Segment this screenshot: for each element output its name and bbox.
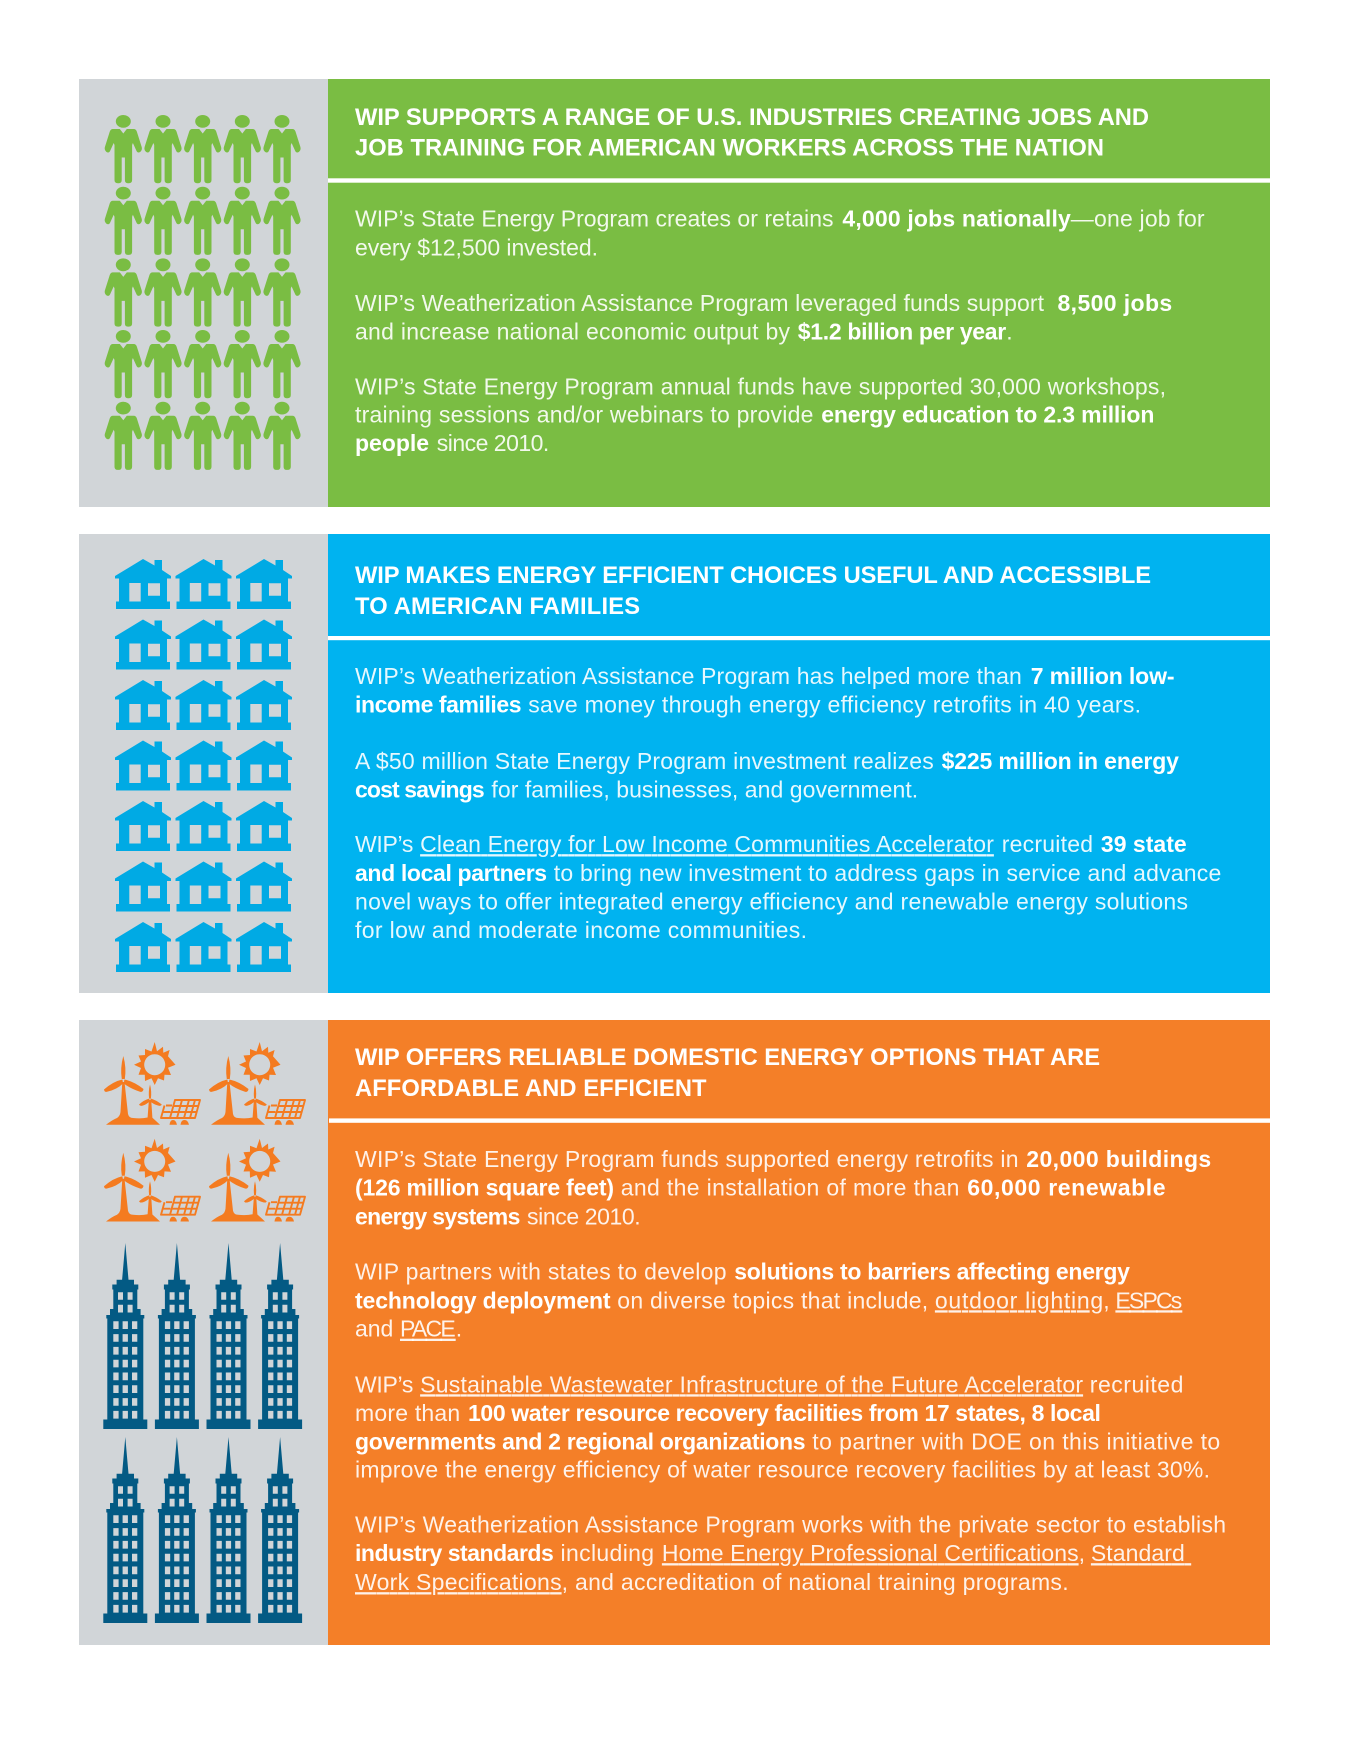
text block: jobs body copy: energy education to 2.3 million [821, 402, 1154, 428]
text block: families body copy: for low and moderate income communities. [355, 917, 807, 943]
text block: families body copy [355, 663, 1221, 943]
text block: families body copy: recruited [1002, 831, 1093, 857]
text block: jobs body copy: people [355, 430, 429, 456]
orange content background [328, 1020, 1270, 1645]
text block: jobs body copy: $1.2 billion per year [798, 319, 1006, 345]
text block: energy body copy: WIP’s Weatherization Assistance Program works with the private sector to establish [355, 1512, 1226, 1538]
text block: families body copy: and local partners [355, 860, 547, 886]
text block: families body copy: Clean Energy for Low Income Communities Accelerator [420, 831, 994, 857]
blue content background [328, 534, 1270, 993]
green content background [328, 79, 1270, 507]
panel: energy options [79, 1020, 1270, 1645]
heading: jobs: WIP SUPPORTS A RANGE OF U.S. INDUSTRIES CREATING JOBS AND [355, 105, 1149, 131]
text block: energy body copy: technology deployment [355, 1287, 611, 1313]
heading: jobs: JOB TRAINING FOR AMERICAN WORKERS ACROSS THE NATION [355, 136, 1104, 162]
text block: energy body copy: recruited [1090, 1371, 1183, 1397]
text block: energy body copy: Sustainable Wastewater Infrastructure of the Future Accelerator [420, 1371, 1083, 1397]
text block: energy body copy: , and accreditation of national training programs. [562, 1569, 1069, 1595]
icon grid: wind and solar [104, 1042, 305, 1222]
text block: families body copy: 39 state [1101, 831, 1187, 857]
text block: energy body copy: outdoor lighting [935, 1287, 1103, 1313]
text block: energy body copy: WIP’s State Energy Program funds supported energy retrofits in [355, 1146, 1018, 1172]
text block: energy body copy: and the installation of more than [621, 1175, 959, 1201]
text block: jobs body copy: since 2010. [437, 430, 549, 456]
text block: families body copy: WIP’s Weatherization Assistance Program has helped more than [355, 663, 1022, 689]
text block: energy body copy: improve the energy efficiency of water resource recovery facilities by at least 30%. [355, 1457, 1210, 1483]
text block: jobs body copy: training sessions and/or webinars to provide [355, 402, 813, 428]
text block: energy body copy: including [560, 1540, 654, 1566]
text block: energy body copy: 100 water resource recovery facilities from 17 states, 8 local [468, 1400, 1101, 1426]
text block: families body copy: A $50 million State Energy Program investment realizes [355, 748, 934, 774]
text block: energy body copy: on diverse topics that include, [617, 1287, 928, 1313]
text block: energy body copy: , [1103, 1287, 1110, 1313]
icon grid: houses [115, 559, 292, 972]
text block: jobs body copy: every $12,500 invested. [355, 234, 598, 260]
text block: jobs body copy [355, 206, 1205, 456]
panel: jobs and job training [79, 79, 1270, 507]
text block: energy body copy: Standard [1091, 1540, 1191, 1566]
text block: jobs body copy: 4,000 jobs nationally [842, 206, 1071, 232]
text block: jobs body copy: WIP’s Weatherization Assistance Program leveraged funds support [355, 290, 1045, 316]
text block: families body copy: to bring new investment to address gaps in service and advance [554, 860, 1221, 886]
text block: jobs body copy: and increase national economic output by [355, 319, 790, 345]
text block: energy body copy: WIP partners with states to develop [355, 1259, 726, 1285]
text block: energy body copy: Home Energy Professional Certifications [662, 1540, 1079, 1566]
text block: energy body copy: 60,000 renewable [967, 1175, 1166, 1201]
heading: jobs [355, 105, 1149, 162]
icon grid: workers [105, 115, 301, 470]
text block: families body copy: 7 million low- [1031, 663, 1174, 689]
text block: jobs body copy: —one job for [1071, 206, 1205, 232]
text block: families body copy: novel ways to offer integrated energy efficiency and renewable energy solutions [355, 889, 1188, 915]
text block: families body copy: for families, businesses, and government. [491, 777, 918, 803]
text block: families body copy: income families [355, 692, 522, 718]
text block: energy body copy: 20,000 buildings [1026, 1146, 1211, 1172]
text block: energy body copy: industry standards [355, 1540, 554, 1566]
text block: energy body copy: WIP’s [355, 1371, 413, 1397]
text block: families body copy: $225 million in energy [942, 748, 1179, 774]
text block: jobs body copy: 8,500 jobs [1058, 290, 1172, 316]
text block: families body copy: WIP’s [355, 831, 413, 857]
text block: energy body copy: and [355, 1316, 393, 1342]
text block: jobs body copy: WIP’s State Energy Program annual funds have supported 30,000 workshops, [355, 373, 1166, 399]
text block: families body copy: save money through energy efficiency retrofits in 40 years. [528, 692, 1141, 718]
text block: energy body copy: more than [355, 1400, 460, 1426]
text block: energy body copy: solutions to barriers affecting energy [734, 1259, 1130, 1285]
heading: families: WIP MAKES ENERGY EFFICIENT CHOICES USEFUL AND ACCESSIBLE [355, 563, 1151, 589]
text block: energy body copy: energy systems [355, 1204, 520, 1230]
icon panel background: families [79, 534, 328, 993]
text block: energy body copy: to partner with DOE on this initiative to [812, 1428, 1220, 1454]
text block: energy body copy: ESPCs [1115, 1287, 1182, 1313]
text block: energy body copy: since 2010. [527, 1204, 641, 1230]
text block: energy body copy [355, 1146, 1226, 1595]
text block: energy body copy: Work Specifications [355, 1569, 562, 1595]
text block: energy body copy: . [456, 1316, 462, 1342]
text block: energy body copy: governments and 2 regional organizations [355, 1428, 806, 1454]
icon panel background: jobs [79, 79, 328, 507]
text block: energy body copy: PACE [400, 1316, 456, 1342]
text block: jobs body copy: WIP’s State Energy Program creates or retains [355, 206, 834, 232]
text block: families body copy: cost savings [355, 777, 485, 803]
text block: energy body copy: (126 million square feet) [355, 1175, 614, 1201]
heading: families: TO AMERICAN FAMILIES [355, 594, 640, 620]
icon panel background: energy [79, 1020, 328, 1645]
icon grid: skyscrapers [103, 1243, 302, 1623]
heading: energy: AFFORDABLE AND EFFICIENT [355, 1076, 707, 1102]
panel: families [79, 534, 1270, 993]
heading: energy: WIP OFFERS RELIABLE DOMESTIC ENERGY OPTIONS THAT ARE [355, 1045, 1100, 1071]
heading: families [355, 563, 1151, 620]
text block: energy body copy: , [1079, 1540, 1085, 1566]
heading: energy [355, 1045, 1100, 1102]
text block: jobs body copy: . [1006, 319, 1013, 345]
